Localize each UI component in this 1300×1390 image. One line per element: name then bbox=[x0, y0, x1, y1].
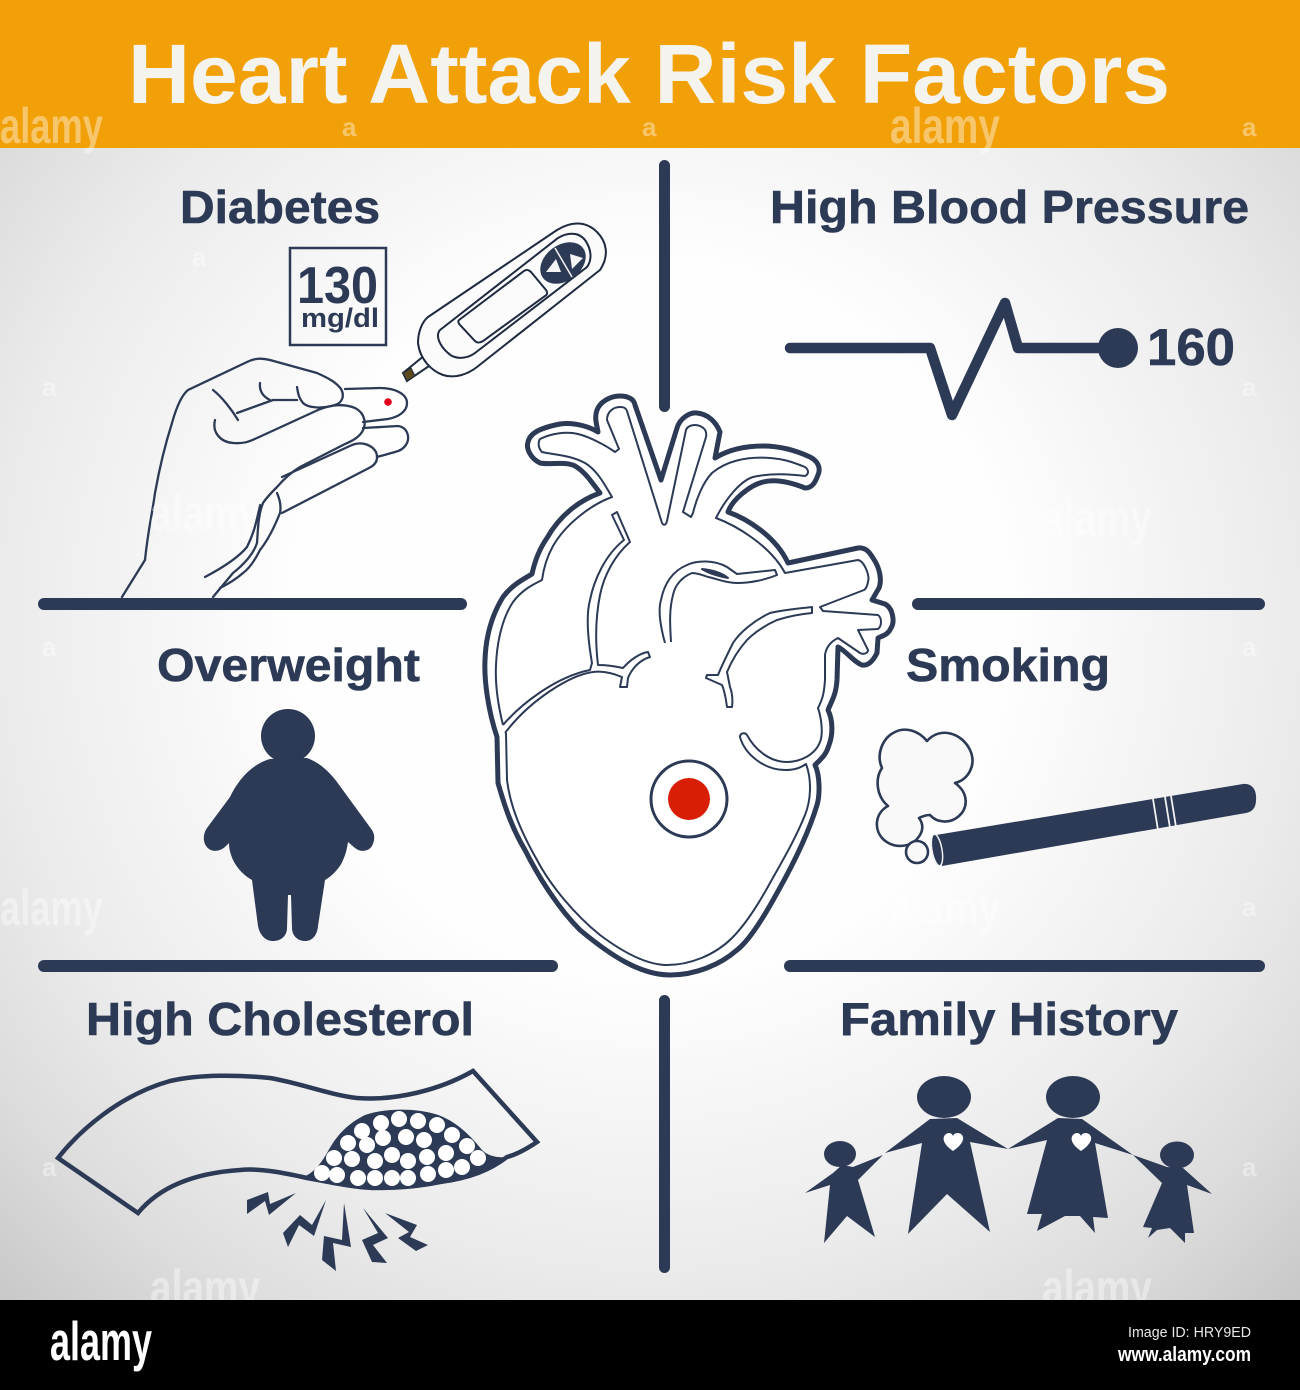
watermarks: alamy bbox=[0, 880, 103, 936]
footer bar: www.alamy.com bbox=[1117, 1344, 1251, 1366]
heading: Diabetes: Diabetes bbox=[180, 181, 380, 233]
watermarks: a bbox=[1242, 112, 1257, 142]
watermarks: a bbox=[192, 242, 207, 272]
watermarks: alamy bbox=[0, 98, 103, 154]
heading: High Blood Pressure: High Blood Pressure bbox=[770, 181, 1249, 233]
left child bbox=[805, 1141, 883, 1243]
watermarks: alamy bbox=[150, 485, 260, 541]
watermarks: a bbox=[42, 1152, 57, 1182]
plaque bbox=[300, 1110, 507, 1188]
father bbox=[885, 1076, 1008, 1234]
footer bar bbox=[0, 1300, 1300, 1390]
watermarks: alamy bbox=[890, 880, 1000, 936]
infarct target marker bbox=[651, 761, 727, 837]
heading: Overweight: Overweight bbox=[157, 639, 420, 691]
right child bbox=[1133, 1142, 1212, 1243]
heading: Family History: Family History bbox=[840, 993, 1178, 1045]
title banner bbox=[0, 0, 1300, 148]
footer bar: alamy bbox=[50, 1310, 152, 1372]
heart outer outline bbox=[485, 396, 893, 975]
watermarks: alamy bbox=[1042, 490, 1152, 546]
watermarks: alamy bbox=[150, 1260, 260, 1316]
watermarks: a bbox=[342, 112, 357, 142]
watermarks: a bbox=[1242, 372, 1257, 402]
heart illustration bbox=[485, 396, 893, 975]
icon: artery with cholesterol plaque bbox=[58, 1071, 537, 1271]
chart: blood pressure line with 160 reading bbox=[790, 303, 1235, 415]
glucose reading box: 130 bbox=[297, 257, 378, 315]
heading: High Cholesterol: High Cholesterol bbox=[86, 993, 474, 1045]
icon: hand with lancet drop bbox=[122, 359, 408, 597]
watermarks: a bbox=[642, 112, 657, 142]
icon: overweight person bbox=[204, 709, 374, 941]
heart inner outline bbox=[496, 407, 881, 965]
icon: family holding hands bbox=[805, 1076, 1212, 1243]
mother bbox=[1008, 1076, 1133, 1233]
watermarks: a bbox=[42, 372, 57, 402]
artery wall bbox=[58, 1071, 537, 1213]
watermarks: a bbox=[42, 632, 57, 662]
heading: Smoking: Smoking bbox=[906, 639, 1110, 691]
watermarks: a bbox=[1242, 892, 1257, 922]
heart bbox=[944, 1133, 963, 1151]
icon: glucose meter bbox=[403, 224, 606, 381]
watermarks: alamy bbox=[890, 98, 1000, 154]
coronary arteries bbox=[503, 512, 812, 733]
footer bar: Image ID: HRY9ED bbox=[1128, 1324, 1251, 1341]
glucose reading box bbox=[290, 248, 386, 345]
chart: blood pressure line with 160 reading: 160 bbox=[1147, 319, 1235, 377]
watermarks: a bbox=[1242, 1152, 1257, 1182]
watermarks: a bbox=[1242, 632, 1257, 662]
icon: cigarette with smoke bbox=[877, 730, 1256, 867]
glucose reading box: mg/dl bbox=[301, 303, 379, 333]
title banner: Heart Attack Risk Factors bbox=[128, 27, 1170, 121]
pain bolts bbox=[247, 1192, 428, 1271]
watermarks: alamy bbox=[1042, 1260, 1152, 1316]
